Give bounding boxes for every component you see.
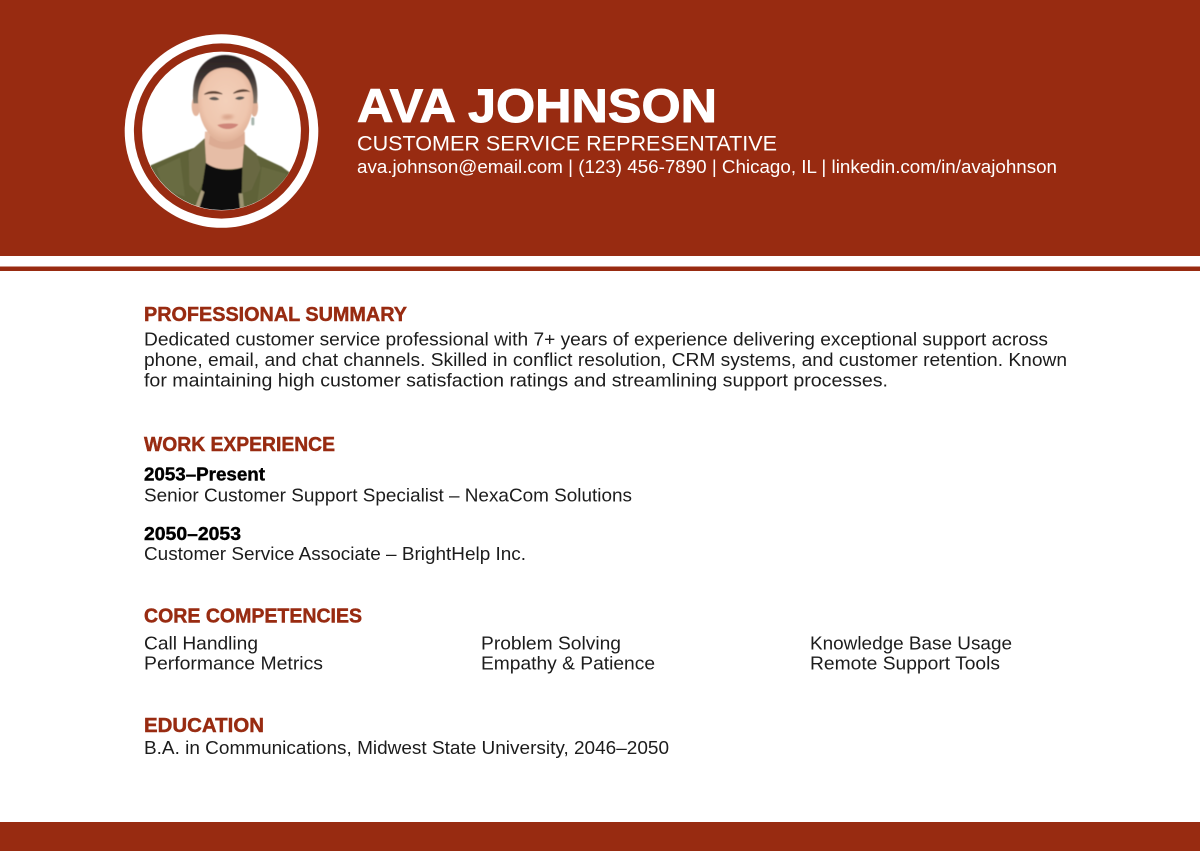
job entry: BrightHelp: Customer Service Associate – BrightHelp Inc. (144, 544, 526, 564)
job entry: NexaCom: 2053–Present (144, 465, 265, 485)
competencies column 2 (481, 633, 655, 673)
section: work experience (144, 434, 632, 564)
jacket zipper (195, 190, 204, 208)
competencies column 2: Problem Solving (481, 633, 621, 653)
heading: education: EDUCATION (144, 715, 264, 737)
degree line: B.A. in Communications, Midwest State University, 2046–2050 (144, 738, 669, 758)
competencies column 1: Call Handling (144, 633, 258, 653)
name and contact block (357, 79, 1057, 177)
mouth (217, 123, 238, 129)
neck (203, 132, 245, 169)
name: AVA JOHNSON (357, 79, 717, 132)
face (198, 68, 253, 142)
summary text (144, 330, 1067, 391)
competencies column 1: Performance Metrics (144, 653, 323, 673)
nose shadow (221, 115, 234, 119)
heading: work experience: WORK EXPERIENCE (144, 434, 335, 456)
summary text: for maintaining high customer satisfaction ratings and streamlining support processes. (144, 371, 888, 391)
job entry: NexaCom (144, 465, 632, 506)
ears (192, 96, 200, 116)
footer band (0, 822, 1200, 851)
header divider line (0, 266, 1200, 271)
competencies column 3 (810, 633, 1012, 673)
summary text: phone, email, and chat channels. Skilled in conflict resolution, CRM systems, and customer retention. Known (144, 350, 1067, 370)
section: professional summary (144, 304, 1067, 391)
competencies column 3: Knowledge Base Usage (810, 633, 1012, 653)
competencies column 2: Empathy & Patience (481, 653, 655, 673)
brows (204, 91, 222, 94)
heading: professional summary: PROFESSIONAL SUMMARY (144, 304, 408, 326)
job title: CUSTOMER SERVICE REPRESENTATIVE (357, 132, 777, 156)
section: core competencies (144, 606, 1012, 673)
jacket body (150, 138, 290, 208)
header band (0, 0, 1200, 256)
section: education (144, 715, 669, 758)
job entry: BrightHelp: 2050–2053 (144, 524, 241, 544)
competencies column 1 (144, 633, 323, 673)
black t-shirt (200, 162, 243, 210)
jacket collars (189, 138, 206, 193)
eyes (209, 97, 219, 100)
portrait photo with double ring (125, 34, 318, 228)
hair (193, 55, 257, 103)
heading: core competencies: CORE COMPETENCIES (144, 606, 362, 628)
job entry: NexaCom: Senior Customer Support Specialist – NexaCom Solutions (144, 486, 632, 506)
summary text: Dedicated customer service professional with 7+ years of experience delivering exceptional support across (144, 330, 1048, 350)
contact details: ava.johnson@email.com | (123) 456-7890 | Chicago, IL | linkedin.com/in/avajohnson (357, 157, 1057, 177)
job entry: BrightHelp (144, 524, 526, 564)
competencies column 3: Remote Support Tools (810, 653, 1000, 673)
